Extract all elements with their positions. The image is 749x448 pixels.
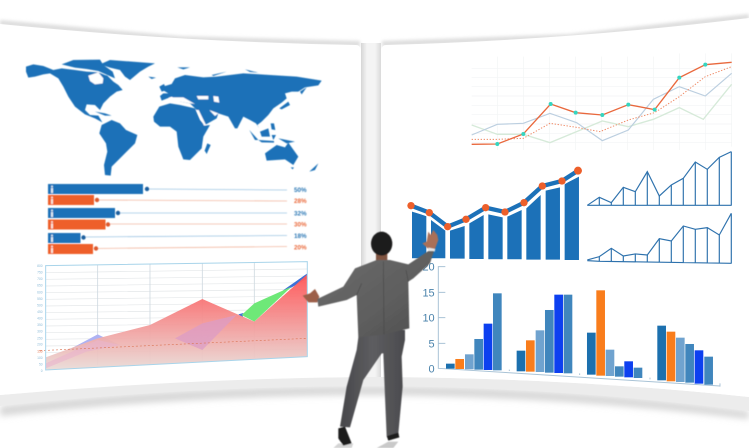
y axis labels: 350	[37, 323, 43, 327]
New Guinea	[278, 138, 295, 143]
row 2	[48, 195, 307, 205]
Philippines	[271, 123, 275, 130]
blue peak	[68, 334, 120, 352]
New Zealand	[309, 163, 318, 172]
row 6: 20%	[294, 244, 307, 252]
Siberian isles	[245, 69, 258, 73]
neck	[376, 252, 387, 261]
Tasmania	[291, 167, 294, 169]
orange series	[472, 62, 732, 144]
y axis labels: 150	[37, 349, 43, 353]
jacket seams	[357, 262, 408, 334]
y axis labels: 50	[39, 362, 43, 366]
Borneo	[260, 128, 270, 137]
multi-line chart	[472, 53, 732, 150]
Hudson Bay	[88, 72, 103, 84]
y axis labels: 500	[37, 303, 43, 307]
floor band and shadow	[0, 377, 749, 419]
Madagascar	[205, 143, 211, 154]
world map	[26, 60, 322, 176]
Americas and Greenland	[26, 60, 156, 176]
row 3: 32%	[294, 210, 307, 218]
group 2	[517, 295, 572, 373]
dashed target line	[40, 338, 307, 351]
group 4	[657, 326, 713, 385]
row 5	[48, 233, 307, 243]
axis labels: 20	[422, 262, 435, 274]
row 4	[48, 220, 307, 230]
y axis labels	[37, 264, 43, 373]
panel: left screen	[0, 24, 360, 395]
axis labels: 15	[422, 287, 435, 299]
row 3	[48, 208, 307, 218]
orange markers	[407, 167, 582, 230]
dotted orange series	[472, 67, 732, 139]
cuff	[428, 248, 435, 252]
businessman seen from behind	[303, 230, 438, 448]
Java	[258, 140, 274, 143]
axis labels: 0	[429, 363, 435, 375]
row 1	[48, 184, 307, 194]
y axis labels: 250	[37, 336, 43, 340]
green series	[472, 84, 732, 143]
green area	[242, 287, 292, 322]
left shoe	[338, 427, 352, 446]
Svalbard	[177, 67, 190, 69]
axis	[438, 267, 720, 387]
right shoe	[387, 433, 399, 441]
comparison bars	[48, 184, 307, 254]
axis labels: 10	[422, 313, 435, 325]
Iceland	[148, 77, 156, 79]
Eurasia, Africa and Oceania	[153, 67, 322, 172]
teal markers	[495, 63, 707, 146]
left hand	[303, 289, 319, 302]
y axis labels: 200	[37, 343, 43, 347]
y axis labels: 700	[37, 277, 43, 281]
row 1: 50%	[294, 187, 307, 194]
outline spike chart lower	[587, 213, 732, 263]
axis labels	[422, 262, 435, 375]
Greenland	[100, 60, 155, 80]
grouped bar chart	[422, 262, 720, 387]
Africa	[153, 103, 210, 160]
y axis labels: 750	[37, 271, 43, 275]
Sumatra	[249, 130, 258, 140]
blue column chart with trend line	[407, 167, 582, 260]
row 5: 18%	[294, 233, 307, 240]
inland seas	[168, 96, 219, 126]
torso, arms and head	[303, 230, 438, 337]
y axis labels: 100	[37, 356, 43, 360]
trend line	[411, 171, 578, 227]
outline spike chart upper	[587, 152, 732, 205]
faint grid	[472, 53, 732, 150]
Kamchatka	[300, 87, 307, 94]
South America	[99, 120, 137, 176]
Sulawesi	[272, 135, 276, 140]
Arctic islands	[62, 60, 115, 78]
y axis labels: 600	[37, 290, 43, 294]
axis labels: 5	[429, 338, 435, 350]
Novaya Zemlya	[212, 72, 227, 76]
floor shadow	[377, 442, 398, 448]
y axis labels: 300	[37, 330, 43, 334]
row 2: 28%	[294, 198, 307, 205]
columns	[412, 177, 579, 260]
area chart	[37, 262, 307, 373]
Australia	[265, 143, 298, 165]
legs	[340, 330, 405, 436]
y axis labels: 650	[37, 284, 43, 288]
right hand	[422, 230, 438, 249]
Eurasia	[160, 73, 322, 128]
panel: right screen	[382, 18, 749, 397]
frame	[46, 262, 307, 370]
North America	[26, 64, 123, 122]
grid	[46, 262, 307, 365]
row 6	[48, 244, 307, 254]
Japan	[279, 102, 290, 109]
Cuba	[95, 112, 112, 116]
y axis labels: 450	[37, 310, 43, 314]
top blue sliver	[283, 273, 307, 291]
head	[371, 232, 392, 256]
y axis labels: 800	[37, 264, 43, 268]
pink overlay	[175, 315, 237, 350]
y axis labels: 0	[41, 369, 43, 373]
white halo	[411, 173, 578, 229]
y axis labels: 550	[37, 297, 43, 301]
blue-grey series	[472, 73, 732, 141]
group 1	[446, 293, 502, 370]
row 4: 30%	[294, 222, 307, 228]
y axis labels: 400	[37, 317, 43, 321]
red area	[46, 274, 307, 370]
trousers and shoes	[333, 330, 405, 448]
UK	[159, 84, 167, 92]
jacket	[317, 251, 434, 337]
group 3	[587, 290, 642, 378]
